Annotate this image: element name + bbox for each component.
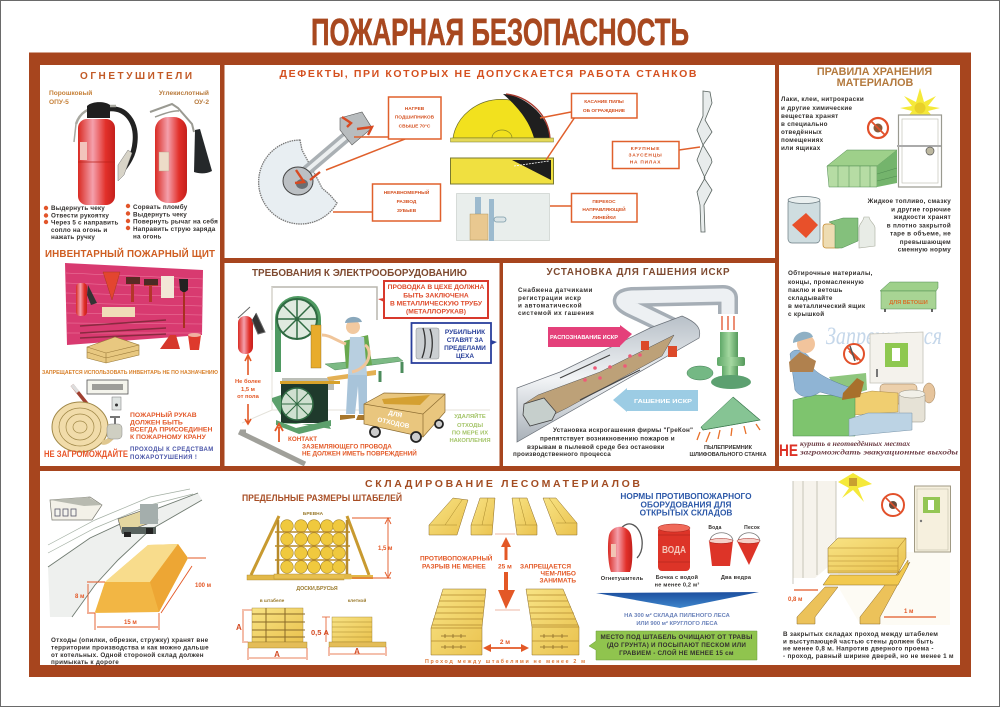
icon: no fire sign [868, 118, 888, 138]
dimension: height above floor: 1,5 м [241, 387, 255, 393]
text: waste note: территории производства и как можно дальше [51, 644, 209, 652]
dimensions: pile [75, 558, 212, 630]
illustration: wall extinguisher [238, 307, 265, 354]
illustration: blocked materials [793, 373, 935, 436]
icon: two buckets: Песок [744, 525, 760, 531]
text: waste note: Отходы (опилки, обрезки, стружку) хранят вне [51, 636, 209, 644]
text: lacquers: помещениях [781, 137, 824, 144]
labels: boards: клеткой [348, 597, 366, 604]
illustration: truck [118, 504, 158, 537]
illustration: guide misalignment [456, 194, 550, 241]
text: wiping materials: паклю и ветошь [788, 287, 843, 294]
callout: metal conduit: (МЕТАЛЛОРУКАВ) [406, 308, 466, 316]
callout: circuit breaker: ЦЕХА [456, 353, 474, 360]
labels: equipment: Огнетушитель [601, 576, 644, 582]
text: per square metres: НА 300 м² СКЛАДА ПИЛЕНОГО ЛЕСА [624, 612, 731, 619]
panel: fire shield [42, 248, 218, 461]
text: GreCon installation: производственного процесса [513, 451, 611, 458]
heading: equipment norms: ОТКРЫТЫХ СКЛАДОВ [640, 508, 732, 518]
illustration: timber stack on beams [797, 538, 910, 624]
illustration: four timber beams [429, 498, 577, 535]
callout: metal conduit: БЫТЬ ЗАКЛЮЧЕНА [403, 292, 469, 300]
illustration: worker [322, 317, 372, 420]
callout: metal conduit [378, 281, 488, 318]
list: powder extinguisher steps: Выдернуть чеку [51, 205, 105, 212]
panel: storage rules [779, 66, 959, 460]
text: passages: ПРОХОДЫ К СРЕДСТВАМ [130, 447, 214, 453]
callout: circuit breaker: ПРЕДЕЛАМИ [444, 345, 486, 352]
text: firebreak: ЗАНИМАТЬ [539, 578, 576, 584]
illustration: exit door [870, 332, 923, 383]
text: remove waste: ОТХОДЫ [457, 423, 483, 429]
illustration: band saw [272, 299, 340, 434]
callout: large burrs: НА ПИЛАХ [630, 160, 661, 166]
text: wiping materials: Обтирочные материалы, [788, 269, 873, 277]
callout: uneven teeth: ЗУБЬЕВ [397, 208, 417, 214]
list: powder extinguisher steps: сопло на огонь и [51, 227, 107, 234]
callout: uneven teeth: НЕРАВНОМЕРНЫЙ [384, 188, 430, 196]
callout: bearing heating: СВЫШЕ 70°С [399, 124, 431, 130]
warning line: ЗАПРЕЩАЕТСЯ ИСПОЛЬЗОВАТЬ ИНВЕНТАРЬ НЕ ПО НАЗНАЧЕНИЮ [42, 370, 218, 376]
text: do not: курить в неотведённых местах [800, 439, 910, 448]
text: GreCon installation: препятствует возникновению пожаров и [540, 436, 675, 442]
icon: no smoking sign [844, 344, 864, 364]
text: firebreak: ЧЕМ-ЛИБО [541, 570, 576, 578]
icon: water barrel: ВОДА [662, 545, 686, 556]
illustration: crossed boards [311, 617, 386, 656]
panel: electrical requirements [235, 268, 497, 464]
text: waste note: примыкать к дороге [51, 659, 119, 666]
text: hose rule: ДОЛЖЕН БЫТЬ [130, 420, 183, 426]
icon: extinguisher [608, 524, 642, 572]
dimension: 1.5 m [352, 518, 393, 578]
text: sensors: регистрации искр [518, 295, 582, 302]
callout: bearing heating: НАГРЕВ [405, 106, 425, 112]
illustration: closed warehouse [793, 473, 950, 625]
arrow: spark extinguishing: ГАШЕНИЕ ИСКР [634, 399, 692, 405]
illustration: pink shield board [65, 263, 203, 345]
labels: boards: ДОСКИ,БРУСЬЯ [296, 586, 338, 592]
text: lacquers: и другие химические [781, 105, 853, 112]
text: wiping materials: складывайте [788, 294, 833, 302]
icon: water barrel [658, 524, 690, 571]
callout: uneven teeth [333, 184, 440, 221]
text: liquid fuel: превышающем [900, 239, 951, 246]
heading: equipment norms: НОРМЫ ПРОТИВОПОЖАРНОГО [620, 491, 752, 501]
illustration: workbench [325, 357, 403, 382]
illustration: stacked boards [236, 608, 307, 660]
callout: large burrs: КРУПНЫЕ [631, 146, 660, 152]
text: dust receiver: ПЫЛЕПРИЕМНИК [704, 445, 753, 451]
arrows: firebreak 25 m [495, 534, 520, 610]
list: CO2 extinguisher steps: Выдернуть чеку [133, 212, 187, 218]
list: powder extinguisher steps [44, 205, 119, 241]
illustration: circular saw with shaft [259, 112, 372, 224]
callout: guide skew: НАПРАВЛЯЮЩЕЙ [582, 205, 626, 213]
list: CO2 extinguisher steps: Повернуть рычаг на себя [133, 218, 218, 226]
callout: metal conduit: В МЕТАЛЛИЧЕСКУЮ ТРУБУ [390, 300, 483, 308]
illustration: rag chest [880, 282, 938, 312]
callout: metal conduit: ПРОВОДКА В ЦЕХЕ ДОЛЖНА [388, 284, 485, 291]
dimension: 1.5 m: 1,5 м [378, 546, 393, 552]
text: closed warehouse rule: и выступающей частью стены должен быть [783, 638, 934, 646]
dimensions: pile: 100 м [195, 583, 212, 589]
heading: max stack sizes: ПРЕДЕЛЬНЫЕ РАЗМЕРЫ ШТАБЕЛЕЙ [242, 492, 402, 503]
text: lacquers: Лаки, клеи, нитрокраски [781, 96, 864, 103]
heading: machine defects: ДЕФЕКТЫ, ПРИ КОТОРЫХ НЕ ДОПУСКАЕТСЯ РАБОТА СТАНКОВ [280, 68, 697, 80]
callout: saw touching guard: КАСАНИЕ ПИЛЫ [584, 99, 624, 105]
heading: electrical requirements: ТРЕБОВАНИЯ К ЭЛЕКТРООБОРУДОВАНИЮ [252, 268, 467, 279]
heading: timber storage: СКЛАДИРОВАНИЕ ЛЕСОМАТЕРИАЛОВ [365, 478, 640, 490]
illustration: big timber stacks [431, 589, 579, 655]
text: liquid fuel: и другие горючие [891, 206, 951, 214]
heading: inventory fire shield: ИНВЕНТАРНЫЙ ПОЖАРНЫЙ ЩИТ [45, 248, 215, 260]
illustration: green storage box [827, 150, 897, 187]
dimension: height above floor: от пола [237, 394, 260, 400]
text: passages: ПОЖАРОТУШЕНИЯ ! [130, 455, 197, 461]
text: liquid fuel: сменную норму [898, 246, 951, 254]
illustration: saw guard [450, 94, 554, 142]
illustration: guard plan view [450, 158, 554, 184]
dimensions: warehouse: 1 м [904, 609, 914, 615]
illustration: crossed boards: 0,5 А [311, 628, 330, 637]
text: ground wire: НЕ ДОЛЖЕН ИМЕТЬ ПОВРЕЖДЕНИЙ [302, 448, 417, 458]
illustration: sawdust pile [95, 544, 188, 613]
text: wiping materials: концы, промасленную [788, 279, 864, 286]
script: prohibited: Запрещается [826, 323, 942, 350]
title: ПОЖАРНАЯ БЕЗОПАСНОСТЬ [311, 12, 689, 54]
text: firebreak: ЗАПРЕЩАЕТСЯ [520, 564, 571, 570]
callout: bearing heating: ПОДШИПНИКОВ [395, 114, 435, 120]
dimensions: pile: 8 м [75, 594, 85, 600]
callout: green clearing note [589, 631, 757, 660]
icon: two buckets: Вода [708, 525, 722, 531]
text: hose rule: ВСЕГДА ПРИСОЕДИНЕН [130, 426, 212, 434]
list: CO2 extinguisher steps: Направить струю заряда [133, 226, 216, 233]
icon: blue triangle [596, 592, 759, 608]
text: dust receiver: ШЛИФОВАЛЬНОГО СТАНКА [689, 452, 767, 458]
list: CO2 extinguisher steps: Сорвать пломбу [133, 203, 188, 211]
text: GreCon installation: Установка искрогашения фирмы "ГреКон" [553, 427, 693, 434]
illustration: fire hose reel [52, 380, 128, 452]
panel: timber storage [48, 473, 954, 666]
labels: equipment: Два ведра [721, 575, 752, 581]
illustration: log stack [247, 511, 373, 580]
text: hose rule: К ПОЖАРНОМУ КРАНУ [130, 434, 207, 441]
illustration: barrel and cans [788, 196, 875, 248]
callout: green clearing note: (ДО ГРУНТА) И ПОСЫПАЮТ ПЕСКОМ ИЛИ [607, 642, 746, 649]
text: liquid fuel: Жидкое топливо, смазку [867, 198, 951, 205]
text: closed warehouse rule: не менее 0,8 м. Напротив дверного проема - [783, 646, 934, 652]
text: closed warehouse rule: - проход, равный ширине дверей, но не менее 1 м [783, 652, 954, 660]
text: remove waste: ПО МЕРЕ ИХ [452, 430, 488, 436]
callout: large burrs [612, 142, 700, 168]
labels: powder extinguisher: Порошковый [49, 89, 92, 97]
text: wiping materials: в металлический ящик [788, 302, 866, 310]
list: powder extinguisher steps: нажать ручку [51, 234, 95, 241]
labels: equipment: не менее 0,2 м³ [655, 582, 699, 588]
illustration: stacked boards: А [274, 650, 280, 659]
callout: saw touching guard [540, 94, 637, 160]
text: firebreak: ПРОТИВОПОЖАРНЫЙ [420, 554, 493, 562]
callout: large burrs: ЗАУСЕНЦЫ [628, 152, 662, 158]
icon: sun [900, 88, 940, 128]
text: ground wire: ЗАЗЕМЛЯЮЩЕГО ПРОВОДА [302, 444, 392, 450]
illustration: duct [517, 295, 728, 442]
heading: equipment norms: ОБОРУДОВАНИЯ ДЛЯ [641, 500, 731, 510]
illustration: sitting worker [789, 332, 864, 400]
callout: guide skew: ПЕРЕКОС [592, 199, 616, 205]
list: powder extinguisher steps: Через 5 с направить [51, 220, 119, 226]
icon: ground contact arrow [275, 424, 283, 442]
dimension: height above floor: Не более [235, 378, 262, 385]
text: wiping materials: с крышкой [788, 310, 824, 318]
panel: machine defects [259, 68, 712, 241]
text: do not [779, 439, 959, 460]
text: per square metres: ИЛИ 900 м² КРУГЛОГО ЛЕСА [636, 620, 718, 627]
callout: uneven teeth: РАЗВОД [397, 199, 417, 205]
illustration: crossed boards: А [354, 647, 360, 656]
text: sensors: системой их гашения [518, 309, 594, 317]
text: remove waste: УДАЛЯЙТЕ [454, 412, 486, 420]
callout: guide skew [550, 194, 637, 222]
text: sensors: Снабжена датчиками [518, 286, 593, 294]
text: liquid fuel: таре в объеме, не [890, 230, 951, 238]
illustration: stacked boards: А [236, 623, 242, 632]
labels: CO2 extinguisher: Углекислотный [159, 89, 209, 97]
illustration: locked door [897, 115, 942, 187]
text: firebreak: 25 м [498, 564, 512, 570]
illustration: road and building [48, 489, 202, 617]
labels: powder extinguisher: ОПУ-5 [49, 99, 69, 106]
text: lacquers: или ящиках [781, 145, 821, 152]
text: do not block: НЕ ЗАГРОМОЖДАЙТЕ [44, 448, 128, 459]
illustration: waste cart: ОТХОДОВ [377, 417, 410, 430]
illustration: log stack: БРЕВНА [303, 511, 324, 517]
text: lacquers: отведённых [781, 129, 822, 136]
text: liquid fuel: в плотно закрытой [887, 222, 951, 230]
arrow: spark detection: РАСПОЗНАВАНИЕ ИСКР [550, 335, 618, 341]
text: passage: Проход между штабелями не менее 2 м [425, 658, 585, 665]
icon: powder extinguisher OPU-5 [74, 102, 135, 205]
text: liquid fuel: жидкости хранят [893, 214, 951, 221]
text: hose rule: ПОЖАРНЫЙ РУКАВ [130, 410, 197, 419]
illustration: wall and conduit [239, 287, 490, 464]
illustration: waste cart [364, 393, 445, 442]
dimension: 2 m [483, 639, 529, 652]
heading: storage rules: ПРАВИЛА ХРАНЕНИЯ [817, 66, 932, 78]
icon: two buckets [708, 525, 760, 566]
illustration: saw burrs profile [697, 91, 712, 232]
labels: equipment: Бочка с водой [656, 574, 699, 581]
illustration: rag chest: ДЛЯ ВЕТОШИ [889, 300, 928, 306]
list: CO2 extinguisher steps [126, 203, 218, 240]
text: closed warehouse rule: В закрытых складах проход между штабелем [783, 630, 938, 638]
illustration: sand box [87, 337, 139, 363]
text: lacquers: вещества хранят [781, 113, 839, 120]
callout: circuit breaker [412, 323, 497, 363]
dimension: height above floor [235, 355, 262, 424]
text: ground wire: КОНТАКТ [288, 436, 317, 443]
text: remove waste: НАКОПЛЕНИЯ [449, 438, 491, 444]
callout: circuit breaker: СТАВЯТ ЗА [447, 337, 484, 344]
heading: storage rules: МАТЕРИАЛОВ [837, 77, 914, 89]
dimension: 2 m: 2 м [500, 639, 510, 646]
callout: green clearing note: МЕСТО ПОД ШТАБЕЛЬ ОЧИЩАЮТ ОТ ТРАВЫ [601, 634, 752, 641]
text: lacquers: в специально [781, 121, 828, 128]
list: powder extinguisher steps: Отвести рукоятку [51, 212, 109, 220]
dimensions: warehouse: 0,8 м [788, 597, 803, 603]
text: firebreak: РАЗРЫВ НЕ МЕНЕЕ [422, 564, 486, 570]
callout: saw touching guard: ОБ ОГРАЖДЕНИЕ [583, 108, 626, 114]
text: sensors: и автоматической [518, 302, 582, 310]
panel: fire extinguishers [44, 71, 218, 241]
icon: fire cone stand and bucket [160, 333, 201, 350]
panel: spark extinguishing [513, 267, 767, 458]
callout: green clearing note: ГРАВИЕМ - СЛОЙ НЕ МЕНЕЕ 15 см [619, 648, 734, 657]
callout: bearing heating [326, 97, 441, 170]
labels: CO2 extinguisher: ОУ-2 [194, 99, 209, 106]
list: CO2 extinguisher steps: на огонь [133, 234, 162, 240]
illustration: green dust collector [687, 316, 760, 442]
text: do not: НЕ [779, 441, 798, 460]
arrow: spark detection [548, 325, 632, 347]
icon: CO2 extinguisher OU-2 [150, 104, 212, 203]
heading: spark extinguishing: УСТАНОВКА ДЛЯ ГАШЕНИЯ ИСКР [546, 267, 730, 278]
labels: boards: в штабеле [260, 597, 285, 604]
heading: extinguishers: ОГНЕТУШИТЕЛИ [80, 71, 192, 82]
text: GreCon installation: взрывам в пылевой среде без остановки [527, 443, 665, 451]
callout: guide skew: ЛИНЕЙКИ [592, 213, 616, 221]
text: do not: загромождать эвакуационные выходы [799, 448, 959, 456]
dimensions: pile: 15 м [124, 620, 137, 626]
arrow: spark extinguishing [613, 388, 698, 412]
illustration: waste cart: ДЛЯ [388, 410, 403, 420]
text: waste note: от котельных. Одной стороной склад должен [51, 651, 204, 659]
dimensions: warehouse [788, 590, 936, 617]
callout: circuit breaker: РУБИЛЬНИК [445, 329, 485, 336]
